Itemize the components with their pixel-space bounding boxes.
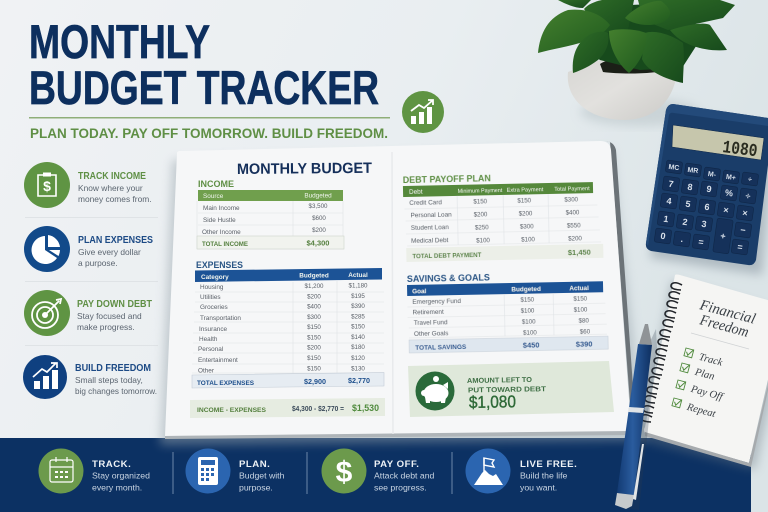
item: plan expenses: Give every dollar [78, 247, 141, 257]
savings and goals table: $390 [576, 339, 593, 349]
savings and goals table [407, 270, 608, 353]
item: plan expenses: PLAN EXPENSES [78, 235, 153, 246]
debt payoff table: $100 [476, 237, 491, 245]
expenses table: $130 [351, 366, 365, 372]
savings and goals table: $100 [521, 308, 535, 315]
checklist: Repeat [685, 402, 718, 420]
icon: piggy bank [421, 376, 448, 403]
debt payoff table: $300 [520, 223, 534, 231]
income table: Main Income [203, 205, 240, 212]
expenses table: Insurance [199, 326, 228, 333]
savings and goals table: Other Goals [414, 330, 448, 338]
savings and goals table: Travel Fund [414, 319, 448, 327]
savings and goals table: $100 [522, 319, 536, 326]
icon: calculator: 1080 [721, 138, 758, 162]
debt payoff table: Student Loan [411, 224, 449, 232]
expenses table: Category [201, 274, 229, 281]
bottom strip: track: TRACK. [92, 459, 131, 470]
item: pay down debt: Stay focused and [77, 311, 142, 321]
callout: amount left toward debt: AMOUNT LEFT TO [467, 377, 533, 385]
calculator keys: 0 [660, 231, 666, 241]
income table [197, 179, 344, 249]
savings and goals table: Actual [569, 285, 589, 292]
income table: Budgeted [304, 192, 332, 200]
expenses table: Entertainment [198, 357, 238, 364]
expenses table: $150 [307, 355, 321, 362]
income table: $200 [312, 227, 326, 234]
expenses table: Transportation [200, 315, 241, 322]
expenses table: $2,900 [304, 377, 326, 386]
calculator keys: 9 [706, 184, 712, 194]
savings and goals table: $60 [580, 328, 591, 336]
checklist: Pay Off [689, 384, 726, 403]
savings and goals table: Emergency Fund [412, 298, 462, 306]
expenses table: $150 [307, 334, 321, 342]
calculator keys: = [698, 237, 704, 247]
savings and goals table: SAVINGS & GOALS [407, 272, 490, 285]
expenses table: TOTAL EXPENSES [197, 380, 254, 387]
expenses table: $195 [351, 293, 365, 300]
expenses table: $200 [307, 344, 321, 352]
calculator keys: 4 [666, 196, 672, 206]
bottom strip: live free [466, 448, 577, 494]
savings and goals table: $80 [578, 318, 590, 325]
icon: growth chart badge [402, 91, 444, 133]
calculator keys: × [723, 205, 729, 215]
calculator keys: 1 [663, 214, 669, 224]
expenses table: $390 [351, 303, 365, 310]
expenses table: Housing [200, 284, 224, 291]
bottom strip: pay off: see progress. [374, 482, 427, 492]
debt payoff table: $200 [519, 210, 533, 218]
income table: INCOME [198, 179, 234, 190]
debt payoff table: $1,450 [568, 248, 591, 257]
bottom strip: live free: you want. [520, 482, 557, 492]
calculator keys: − [740, 225, 746, 235]
bottom strip: track [38, 448, 150, 494]
savings and goals table: $100 [523, 330, 537, 337]
icon: dollar: $ [336, 456, 353, 489]
bottom strip: track: Stay organized [92, 470, 150, 480]
income table: TOTAL INCOME [202, 241, 249, 248]
expenses table: $400 [307, 304, 321, 310]
calculator keys [654, 160, 759, 255]
checklist: Track [698, 352, 724, 369]
expenses table: $300 [307, 314, 321, 321]
debt payoff table: Medical Debt [411, 237, 449, 245]
expenses table: Budgeted [299, 272, 329, 280]
debt payoff table: Credit Card [409, 199, 442, 207]
calculator keys: 3 [701, 219, 707, 229]
debt payoff table: $150 [473, 198, 488, 206]
debt payoff table: $400 [566, 209, 580, 217]
expenses table: EXPENSES [196, 260, 243, 271]
debt payoff table: $200 [568, 235, 583, 243]
debt payoff table: Minimum Payment [458, 188, 503, 195]
expenses table: Groceries [200, 304, 228, 311]
debt payoff table: TOTAL DEBT PAYMENT [412, 252, 482, 260]
calculator keys: 2 [682, 217, 688, 227]
expenses table: Personal [198, 346, 223, 353]
expenses table: $140 [351, 334, 365, 341]
expenses table: $200 [307, 294, 321, 300]
item: build freedom: Small steps today, [75, 375, 143, 385]
icon: mountain flag [474, 458, 503, 485]
tagline: PLAN TODAY. PAY OFF TOMORROW. BUILD FREEDOM. [30, 126, 388, 141]
item: build freedom [23, 355, 157, 399]
savings and goals table: $150 [573, 296, 588, 303]
debt payoff table: $550 [567, 222, 581, 230]
savings and goals table: Goal [412, 288, 427, 295]
expenses table: Actual [348, 272, 368, 279]
debt payoff table: $100 [521, 236, 536, 244]
debt payoff table: Personal Loan [410, 212, 452, 219]
debt payoff table: $200 [474, 211, 488, 219]
expenses table: $150 [307, 366, 321, 372]
icon: calculator [646, 104, 768, 275]
calculator keys: . [680, 234, 684, 244]
bottom strip: plan: Budget with [239, 470, 285, 480]
item: pay down debt: PAY DOWN DEBT [77, 299, 152, 310]
calculator keys: ÷ [745, 191, 751, 201]
calculator keys: % [724, 187, 734, 199]
panel: feature list [23, 162, 158, 399]
calculator keys: ÷ [747, 176, 752, 184]
bottom strip: live free: Build the life [520, 470, 567, 480]
calculator keys: = [737, 242, 743, 252]
bottom strip: live free: LIVE FREE. [520, 459, 577, 470]
calculator keys: M- [707, 171, 717, 179]
item: track income: $ [43, 178, 51, 194]
income table: Source [203, 193, 224, 200]
expenses table: Utilities [200, 294, 221, 301]
expenses table: $150 [351, 324, 365, 330]
debt payoff table: $300 [564, 196, 579, 204]
item: build freedom: BUILD FREEDOM [75, 363, 151, 374]
expenses table: Health [199, 336, 218, 343]
page heading: MONTHLY BUDGET [237, 160, 372, 178]
income minus expenses box [190, 398, 385, 418]
income table: $4,300 [307, 238, 329, 248]
debt payoff table: Debt [409, 189, 423, 196]
expenses table: $1,200 [305, 283, 324, 290]
income minus expenses box: $4,300 - $2,770 = [292, 406, 344, 413]
icon: calculator small [198, 457, 218, 485]
income minus expenses box: $1,530 [352, 403, 379, 414]
title [29, 15, 379, 114]
item: pay down debt [24, 290, 152, 336]
debt payoff table: $250 [475, 224, 489, 232]
income table: Other Income [202, 229, 241, 236]
debt payoff table: $150 [517, 197, 532, 205]
expenses table: $150 [307, 324, 321, 331]
savings and goals table: Budgeted [511, 286, 541, 293]
bottom strip: pay off [322, 448, 435, 494]
savings and goals table: $450 [523, 340, 540, 350]
calculator keys: 8 [687, 182, 693, 192]
expenses table: $285 [351, 314, 365, 320]
notebook spiral binding [641, 283, 682, 422]
bottom strip: track: every month. [92, 482, 142, 492]
bottom band [0, 438, 751, 512]
title: MONTHLY [29, 15, 210, 68]
handwriting: financial freedom [697, 297, 757, 341]
panel: open budget book [165, 141, 636, 439]
icon: calendar [50, 457, 73, 482]
savings and goals table: Retirement [412, 309, 444, 316]
item: plan expenses [24, 226, 153, 272]
bottom strip: plan: purpose. [239, 482, 273, 492]
calculator keys: MC [668, 164, 680, 172]
income minus expenses box: INCOME - EXPENSES [197, 407, 266, 414]
income table: Side Hustle [203, 217, 236, 224]
title: BUDGET TRACKER [29, 61, 379, 114]
income table: $600 [312, 215, 326, 222]
handwriting: financial freedom: Freedom [697, 312, 751, 341]
spiral notebook [640, 274, 768, 470]
calculator screen [672, 125, 764, 160]
debt payoff table [403, 171, 603, 262]
callout: amount left toward debt: $1,080 [469, 392, 516, 412]
item: track income: money comes from. [78, 194, 152, 204]
icon: notebook page stack shadow [160, 150, 645, 445]
expenses table: $2,770 [348, 376, 370, 385]
bottom strip: plan: PLAN. [239, 459, 270, 470]
calculator keys: × [742, 208, 748, 218]
expenses table [192, 260, 384, 388]
callout: amount left toward debt [408, 361, 614, 417]
item: track income: TRACK INCOME [78, 171, 146, 182]
checklist: Plan [693, 367, 716, 383]
debt payoff table: DEBT PAYOFF PLAN [403, 173, 491, 186]
calculator keys: M+ [725, 174, 736, 182]
pen [615, 324, 657, 510]
callout: amount left toward debt: PUT TOWARD DEBT [468, 386, 547, 394]
checklist [671, 348, 726, 420]
debt payoff table: Extra Payment [507, 187, 544, 194]
savings and goals table: $100 [574, 307, 588, 314]
income table: $3,500 [309, 203, 328, 210]
calculator keys: 5 [685, 199, 691, 209]
savings and goals table: $150 [520, 297, 535, 304]
item: plan expenses: a purpose. [78, 258, 118, 268]
savings and goals table: TOTAL SAVINGS [415, 344, 467, 352]
expenses table: $180 [351, 344, 365, 351]
bottom strip: plan [186, 448, 285, 494]
expenses table: $120 [351, 355, 365, 362]
item: build freedom: big changes tomorrow. [75, 386, 157, 396]
calculator keys: + [720, 231, 726, 241]
debt payoff table: Total Payment [554, 186, 590, 193]
icon: potted plant [538, 0, 735, 126]
item: pay down debt: make progress. [77, 322, 135, 332]
bottom strip: pay off: Attack debt and [374, 470, 435, 480]
calculator keys: 7 [668, 179, 674, 189]
handwriting: financial freedom: Financial [697, 297, 757, 328]
item: track income: Know where your [78, 183, 143, 193]
bottom strip: pay off: PAY OFF. [374, 459, 419, 470]
expenses table: $1,180 [349, 282, 368, 290]
calculator keys: MR [687, 167, 699, 175]
calculator keys: 6 [704, 202, 710, 212]
item: track income [24, 162, 152, 208]
expenses table: Other [198, 368, 215, 374]
